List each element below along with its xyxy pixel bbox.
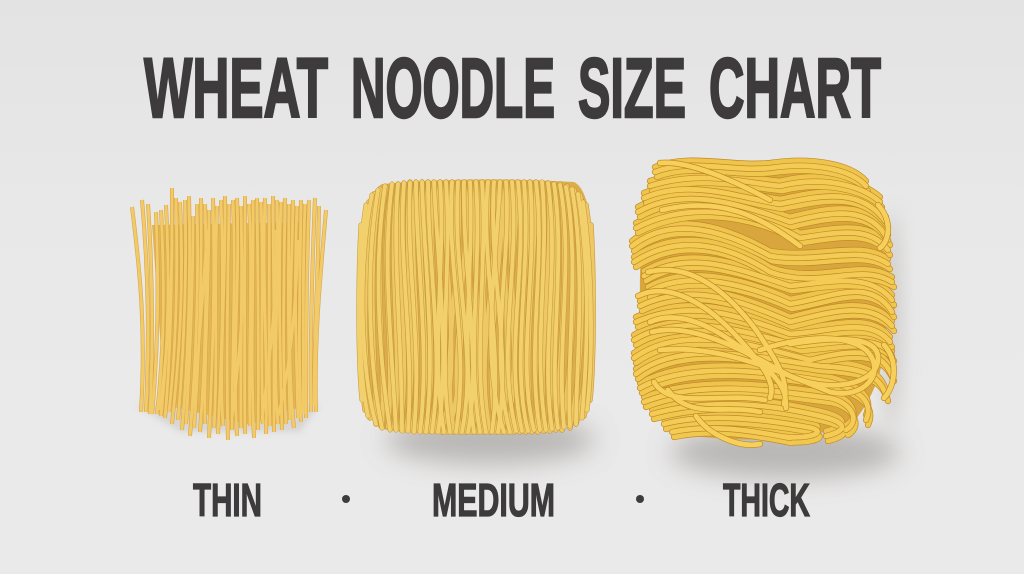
title: CHART [709,41,881,135]
separator dot [636,495,644,503]
label: medium: MEDIUM [432,474,555,526]
title [144,41,881,135]
separator dot [342,495,350,503]
title: NOODLE [351,41,555,135]
thin noodles [132,188,326,440]
label: thick: THICK [723,474,810,526]
label: thin: THIN [193,474,262,526]
title: WHEAT [144,41,328,135]
medium noodles [358,179,595,464]
thick noodles [632,161,902,478]
title: SIZE [578,41,686,135]
